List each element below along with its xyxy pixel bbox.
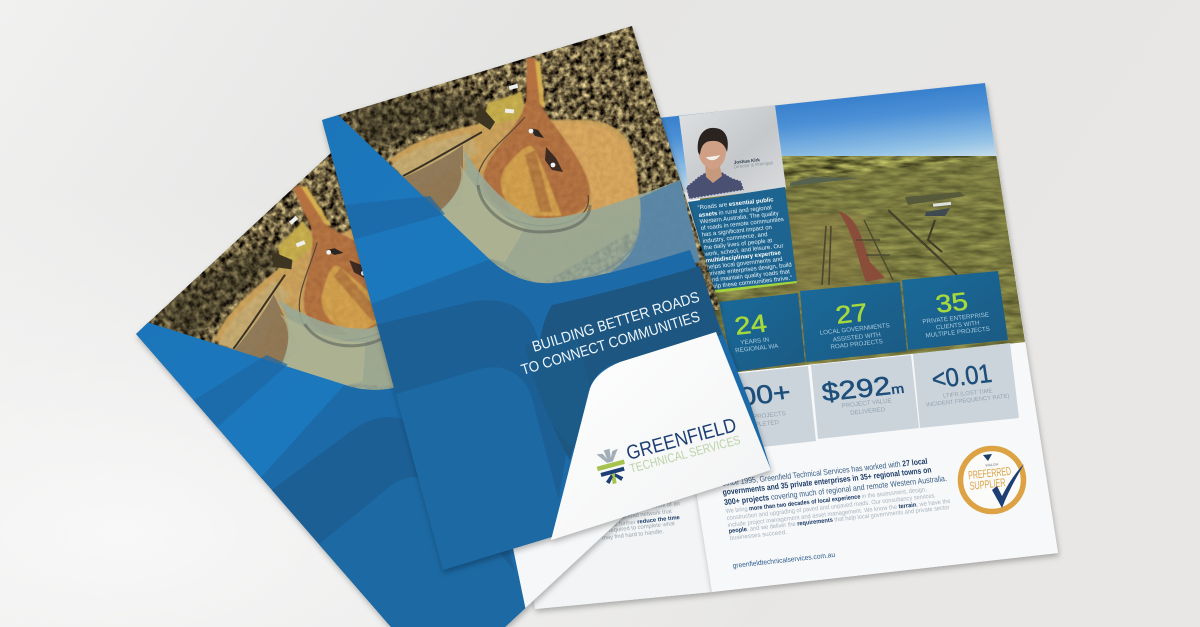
stat tile: 35 private enterprise clients <box>902 271 1008 350</box>
front cover <box>320 20 780 580</box>
name caption: Joshua Kirk <box>733 157 761 165</box>
preferred supplier seal: PREFERRED <box>968 466 1012 482</box>
stat tile: 27 local governments <box>800 282 907 362</box>
quote box: “Roads are essential public <box>697 197 775 211</box>
lead paragraph: 300+ projects covering much of regional and remote Western Australia. <box>723 474 947 507</box>
quote box: Western Australia. The quality <box>699 211 779 225</box>
quote box: assets in rural and regional <box>698 205 772 219</box>
supporting paragraph: We bring more than two decades of local experience in the assessment, design, <box>725 486 927 515</box>
stat tile: <0.01 LTIFR: INCIDENT FREQUENCY RATE) <box>926 394 1010 408</box>
open brochure spread <box>532 83 1062 614</box>
stat tile: 27 local governments: ASSISTED WITH <box>832 331 881 344</box>
portrait panel <box>679 105 786 200</box>
quote box: helps local governments and <box>706 257 783 271</box>
logo mark <box>593 446 629 487</box>
stat tile: <0.01 LTIFR <box>913 343 1019 428</box>
left page body copy <box>600 501 681 542</box>
left page body copy: the regional road network of an <box>600 501 680 516</box>
preferred supplier seal: SUPPLIER <box>969 477 1006 493</box>
quote box: work, school, and leisure. Our <box>703 243 784 258</box>
stat tile: $292m project value <box>811 355 919 439</box>
lead paragraph: Since 1995, Greenfield Technical Services has worked with 27 local <box>721 457 928 488</box>
stat tile: 300+ road projects <box>720 366 816 449</box>
quote box: help these communities thrive.” <box>709 276 793 290</box>
supporting paragraph: construction and upgrading of paved and unpaved roads. Our consultancy services <box>726 492 935 522</box>
left page body copy: may find hard to handle. <box>602 529 665 542</box>
right inside page <box>660 83 1062 598</box>
stat tile: 24 years: 24 <box>733 310 769 341</box>
stat tile: 35 private enterprise clients: MULTIPLE PROJECTS <box>925 326 990 339</box>
stat tile: 300+ road projects: 300+ <box>720 377 793 414</box>
logo tagline: TECHNICAL SERVICES <box>628 433 742 476</box>
supporting paragraph: businesses succeed. <box>729 529 788 542</box>
stat tile: 24 years: REGIONAL WA <box>735 343 780 354</box>
lead paragraph: governments and 35 private enterprises in 35+ regional towns on <box>722 465 932 497</box>
left page body copy: efficient road network that <box>606 509 673 522</box>
stat tile: <0.01 LTIFR: LTIFR (LOST TIME <box>943 388 993 400</box>
quote box: the daily lives of people at <box>703 238 773 251</box>
stat tile: 300+ road projects: COMPLETED <box>740 419 780 430</box>
stat tile: 27 local governments: ROAD PROJECTS <box>830 338 883 351</box>
stat tile: <0.01 LTIFR: <0.01 <box>929 358 994 394</box>
cover title: TO CONNECT COMMUNITIES <box>519 308 702 379</box>
website URL: greenfieldtechnicalservices.com.au <box>732 550 836 570</box>
quote box: of roads in remote communities <box>700 217 784 232</box>
left inside page <box>461 122 712 609</box>
back cover copy, rotated <box>136 153 635 627</box>
left page body copy: required to complete what <box>608 521 676 534</box>
preferred supplier seal <box>960 448 1024 512</box>
stat tile: 27 local governments: 27 <box>834 299 870 330</box>
supporting paragraph: include project management and asset management. We know the terrain, we have the <box>727 498 951 529</box>
supporting paragraph: people, and we deliver the requirements that help local governments and private sector <box>728 504 950 535</box>
landscape photo <box>660 83 1025 372</box>
stat tile: 24 years <box>719 293 805 372</box>
stat tile: 35 private enterprise clients: CLIENTS WITH <box>936 320 980 331</box>
preferred supplier seal: WALGA <box>985 462 999 468</box>
quote box <box>688 187 797 293</box>
stat tile: $292m project value: DELIVERED <box>850 406 886 417</box>
left page body copy: to further reduce the time <box>612 515 681 528</box>
stat tile: 300+ road projects: ROAD PROJECTS <box>733 410 786 423</box>
name caption: Director & Principal <box>733 160 773 169</box>
supporting paragraph <box>725 486 951 542</box>
Greenfield logo <box>593 414 742 487</box>
stat tile: 27 local governments: LOCAL GOVERNMENTS <box>819 322 890 337</box>
stat tile: 35 private enterprise clients: PRIVATE ENTERPRISE <box>922 311 990 326</box>
quote box: and maintain quality roads that <box>708 269 791 284</box>
stat tile: 24 years: YEARS IN <box>740 336 770 347</box>
stat tile: $292m project value: PROJECT VALUE <box>841 397 892 410</box>
quote box: private enterprises design, build <box>707 262 792 277</box>
quote box: multidisciplinary expertise <box>705 250 782 264</box>
lead paragraph <box>721 457 947 507</box>
portrait of Joshua Kirk <box>686 128 744 199</box>
quote box: industry, commerce, and <box>702 232 768 245</box>
logo wordmark: GREENFIELD <box>624 414 739 465</box>
stat tile: $292m project value: $292 m <box>820 369 906 407</box>
cover title: BUILDING BETTER ROADS <box>530 289 702 356</box>
quote box: has a significant impact on <box>701 225 772 238</box>
stat tile: 35 private enterprise clients: 35 <box>934 288 970 319</box>
